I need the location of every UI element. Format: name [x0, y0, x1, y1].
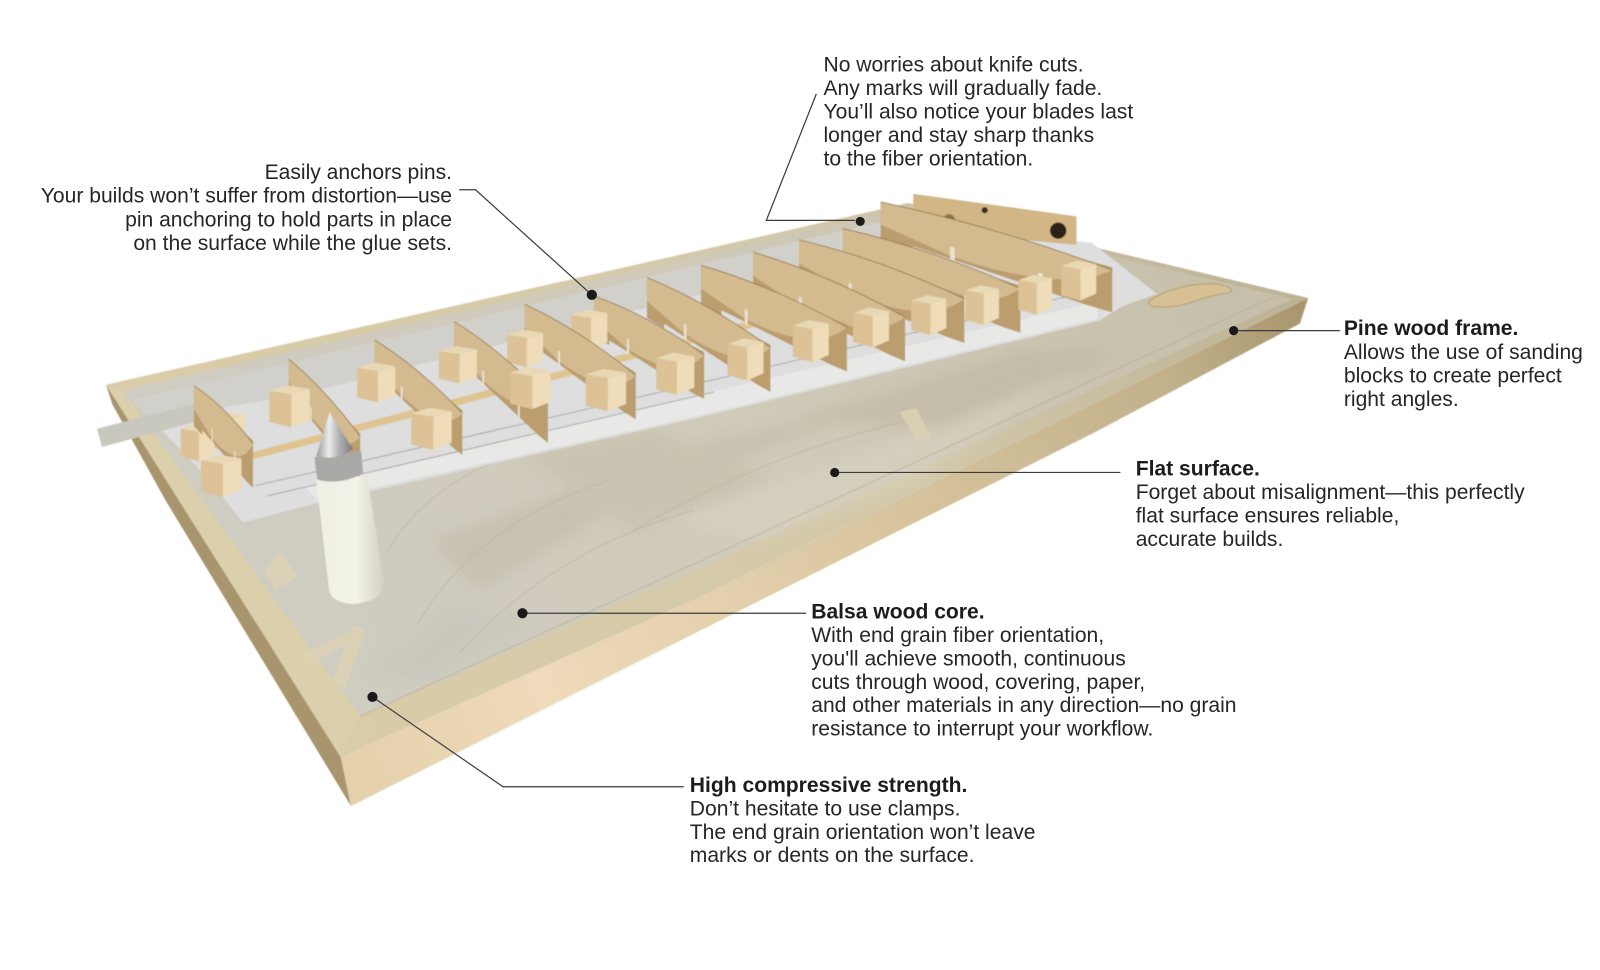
callout: knife cuts: Any marks will gradually fade.: [823, 77, 1102, 100]
callout: easily anchors pins: on the surface while the glue sets.: [133, 232, 452, 255]
plastic sheet: [133, 222, 1157, 522]
callout: pine wood frame: Allows the use of sanding: [1344, 341, 1583, 364]
callout: knife cuts: You’ll also notice your blades last: [823, 100, 1133, 123]
callout: easily anchors pins: Easily anchors pins.: [265, 161, 452, 184]
callout: high compressive strength: marks or dents on the surface.: [690, 844, 974, 867]
callout: easily anchors pins: pin anchoring to hold parts in place: [125, 209, 452, 232]
board front side face: [341, 298, 1308, 806]
balsa surface: [122, 207, 1292, 716]
balsa oval part: [1148, 284, 1232, 307]
photo: building board: [97, 194, 1308, 806]
callout: balsa wood core: you'll achieve smooth, continuous: [811, 647, 1126, 670]
callout: knife cuts: No worries about knife cuts.: [823, 53, 1084, 76]
callout: knife cuts: [766, 53, 1133, 226]
hobby knife in white bottle: [314, 412, 384, 604]
callout: balsa wood core: [517, 600, 1237, 741]
callout: flat surface: [830, 458, 1525, 551]
callout: easily anchors pins: Your builds won’t suffer from distortion—use: [41, 185, 452, 208]
callout: flat surface: Forget about misalignment—this perfectly: [1136, 481, 1525, 504]
callout: balsa wood core: resistance to interrupt your workflow.: [811, 718, 1153, 741]
callout: high compressive strength: The end grain orientation won’t leave: [690, 821, 1035, 844]
callout: balsa wood core: cuts through wood, covering, paper,: [811, 671, 1145, 694]
surface grain patches: [367, 352, 1122, 684]
callout: balsa wood core: With end grain fiber orientation,: [811, 624, 1104, 647]
callout: high compressive strength: High compressive strength.: [690, 774, 967, 797]
board left side face: [106, 385, 351, 806]
callout: pine wood frame: right angles.: [1344, 388, 1459, 411]
dowel spine: [240, 291, 878, 459]
callout: balsa wood core: Balsa wood core.: [811, 600, 985, 623]
masking tape: [263, 408, 931, 690]
wood frame rim: [106, 203, 1308, 757]
callout: pine wood frame: Pine wood frame.: [1344, 317, 1518, 340]
callout: pine wood frame: [1229, 317, 1583, 411]
callout: flat surface: accurate builds.: [1136, 528, 1283, 551]
callout: pine wood frame: blocks to create perfect: [1344, 365, 1562, 388]
callout: high compressive strength: [367, 692, 1035, 867]
callout: easily anchors pins: [41, 161, 597, 300]
callout: balsa wood core: and other materials in any direction—no grain: [811, 694, 1237, 717]
callout: high compressive strength: Don’t hesitate to use clamps.: [690, 797, 960, 820]
callout: flat surface: Flat surface.: [1136, 458, 1260, 481]
callout: flat surface: flat surface ensures reliable,: [1136, 504, 1399, 527]
steel ruler: [97, 404, 200, 447]
callout: knife cuts: longer and stay sharp thanks: [823, 124, 1094, 147]
rear former plate: [913, 194, 1077, 245]
callout: knife cuts: to the fiber orientation.: [823, 147, 1033, 170]
ribs and support blocks: [181, 199, 1112, 497]
